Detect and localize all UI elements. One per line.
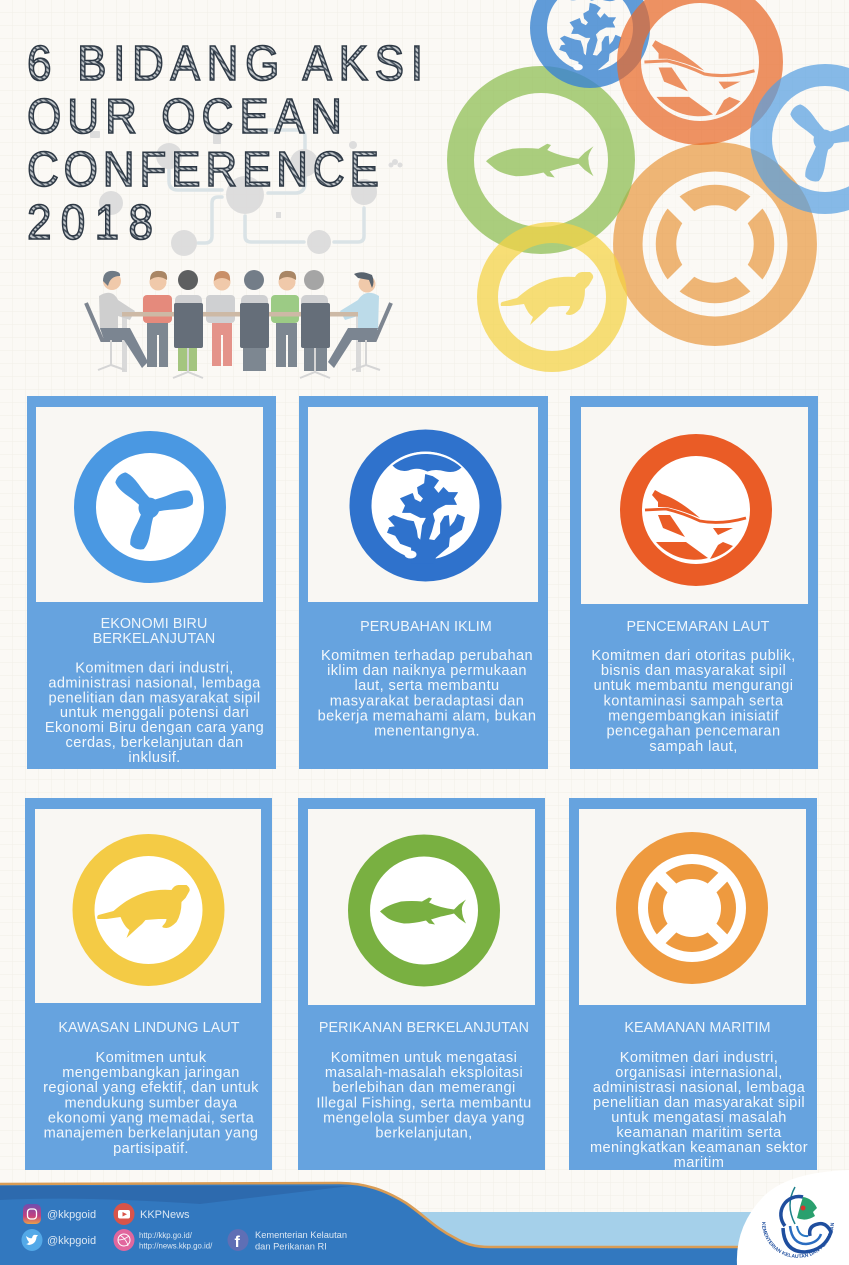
body text: iklim dan naiknya permukaan — [327, 663, 527, 679]
body text: organisasi internasional, — [615, 1065, 783, 1081]
body text: untuk menggali potensi dari — [60, 705, 249, 721]
panel: keamanan maritim — [569, 798, 817, 1171]
social: youtube — [114, 1203, 190, 1225]
body text: bisnis dan masyarakat sipil — [601, 663, 786, 679]
body text: penelitian dan masyarakat sipil — [593, 1095, 805, 1111]
icon: life buoy — [627, 843, 757, 973]
heading: KEAMANAN MARITIM — [624, 1020, 771, 1036]
title — [27, 36, 423, 250]
heading: PENCEMARAN LAUT — [627, 619, 770, 635]
top circle: coral — [538, 0, 642, 80]
body text: mengembangkan inisiatif — [608, 708, 779, 724]
body text: sampah laut, — [649, 739, 738, 755]
body text: untuk mengatasi masalah — [611, 1110, 787, 1126]
social: twitter: @kkpgoid — [47, 1235, 96, 1247]
top circle: bottle — [629, 0, 771, 133]
body text: penelitian dan masyarakat sipil — [49, 690, 260, 706]
heading: KAWASAN LINDUNG LAUT — [58, 1020, 240, 1036]
body text: Komitmen dari otoritas publik, — [591, 648, 796, 664]
meeting illustration — [86, 270, 391, 378]
social: facebook: Kementerian Kelautan — [255, 1230, 347, 1240]
body text: maritim — [674, 1155, 724, 1171]
icon: bottle — [631, 445, 761, 575]
body text: administrasi nasional, lembaga — [593, 1080, 806, 1096]
title: 2018 — [27, 195, 153, 250]
body text: untuk membantu mengurangi — [594, 678, 793, 694]
icon: propeller — [85, 442, 215, 572]
social: facebook: f — [234, 1234, 240, 1251]
social: instagram — [23, 1204, 96, 1224]
logo area — [736, 1170, 849, 1265]
panel: kawasan lindung laut — [25, 798, 272, 1170]
body text: meningkatkan keamanan sektor — [590, 1140, 808, 1156]
body text: administrasi nasional, lembaga — [48, 675, 261, 691]
body text: kontaminasi sampah serta — [604, 694, 784, 710]
title: CONFERENCE — [27, 142, 379, 197]
body text: manajemen berkelanjutan yang — [44, 1126, 258, 1142]
body text: Illegal Fishing, serta membantu — [316, 1096, 532, 1112]
heading: EKONOMI BIRU — [101, 616, 207, 632]
footer band — [0, 1183, 760, 1265]
body text: Komitmen untuk — [95, 1050, 207, 1066]
top circle: turtle — [488, 232, 616, 362]
social: website — [114, 1229, 213, 1251]
body text: partisipatif. — [113, 1141, 189, 1157]
body text: Komitmen dari industri, — [75, 660, 234, 676]
body text: cerdas, berkelanjutan dan — [66, 735, 243, 751]
body text: laut, serta membantu — [354, 678, 500, 694]
body text: Komitmen untuk mengatasi — [331, 1050, 517, 1066]
social: instagram: @kkpgoid — [47, 1209, 96, 1221]
heading: PERUBAHAN IKLIM — [360, 619, 492, 635]
body text: regional yang efektif, dan untuk — [43, 1080, 259, 1096]
title: 6 BIDANG AKSI — [27, 36, 423, 91]
body text: masalah-masalah eksploitasi — [325, 1065, 523, 1081]
body text: Komitmen dari industri, — [620, 1050, 778, 1066]
body text: menentangnya. — [374, 724, 480, 740]
heading: PERIKANAN BERKELANJUTAN — [319, 1020, 529, 1036]
icon: coral — [360, 440, 490, 570]
body text: masyarakat beradaptasi dan — [330, 694, 524, 710]
panel: pencemaran laut — [570, 396, 818, 769]
network diagram — [90, 130, 402, 256]
body text: ekonomi yang memadai, serta — [48, 1110, 255, 1126]
body text: mendukung sumber daya — [64, 1096, 238, 1112]
body text: berlebihan dan memerangi — [332, 1080, 516, 1096]
body text: pencegahan pencemaran — [607, 724, 780, 740]
icon: fish — [359, 846, 489, 976]
body text: keamanan maritim serta — [616, 1125, 782, 1141]
social: facebook — [228, 1229, 347, 1252]
top circle: fish — [460, 80, 622, 240]
social: facebook: dan Perikanan RI — [255, 1242, 327, 1252]
logo mark: KEMENTERIAN KELAUTAN DAN PERIKANAN — [762, 1222, 834, 1258]
top circle: propeller — [761, 75, 849, 203]
icon: turtle — [84, 845, 214, 975]
body text: bekerja memahami alam, bukan — [318, 708, 536, 724]
social: twitter — [22, 1229, 96, 1251]
body text: mengelola sumber daya yang — [323, 1110, 525, 1126]
social: website: http://kkp.go.id/ — [139, 1231, 193, 1240]
top circle: life buoy — [628, 157, 802, 331]
body text: Ekonomi Biru dengan cara yang — [45, 720, 264, 736]
body text: inklusif. — [128, 750, 181, 766]
body text: berkelanjutan, — [375, 1126, 473, 1142]
panel: perubahan iklim — [299, 396, 548, 769]
body text: mengembangkan jaringan — [62, 1065, 240, 1081]
panel: perikanan berkelanjutan — [298, 798, 545, 1170]
title: OUR OCEAN — [27, 89, 342, 144]
body text: Komitmen terhadap perubahan — [321, 648, 533, 664]
social: youtube: KKPNews — [140, 1209, 190, 1221]
social: website: http://news.kkp.go.id/ — [139, 1242, 213, 1250]
heading: BERKELANJUTAN — [93, 631, 215, 647]
panel: ekonomi biru — [27, 396, 276, 769]
